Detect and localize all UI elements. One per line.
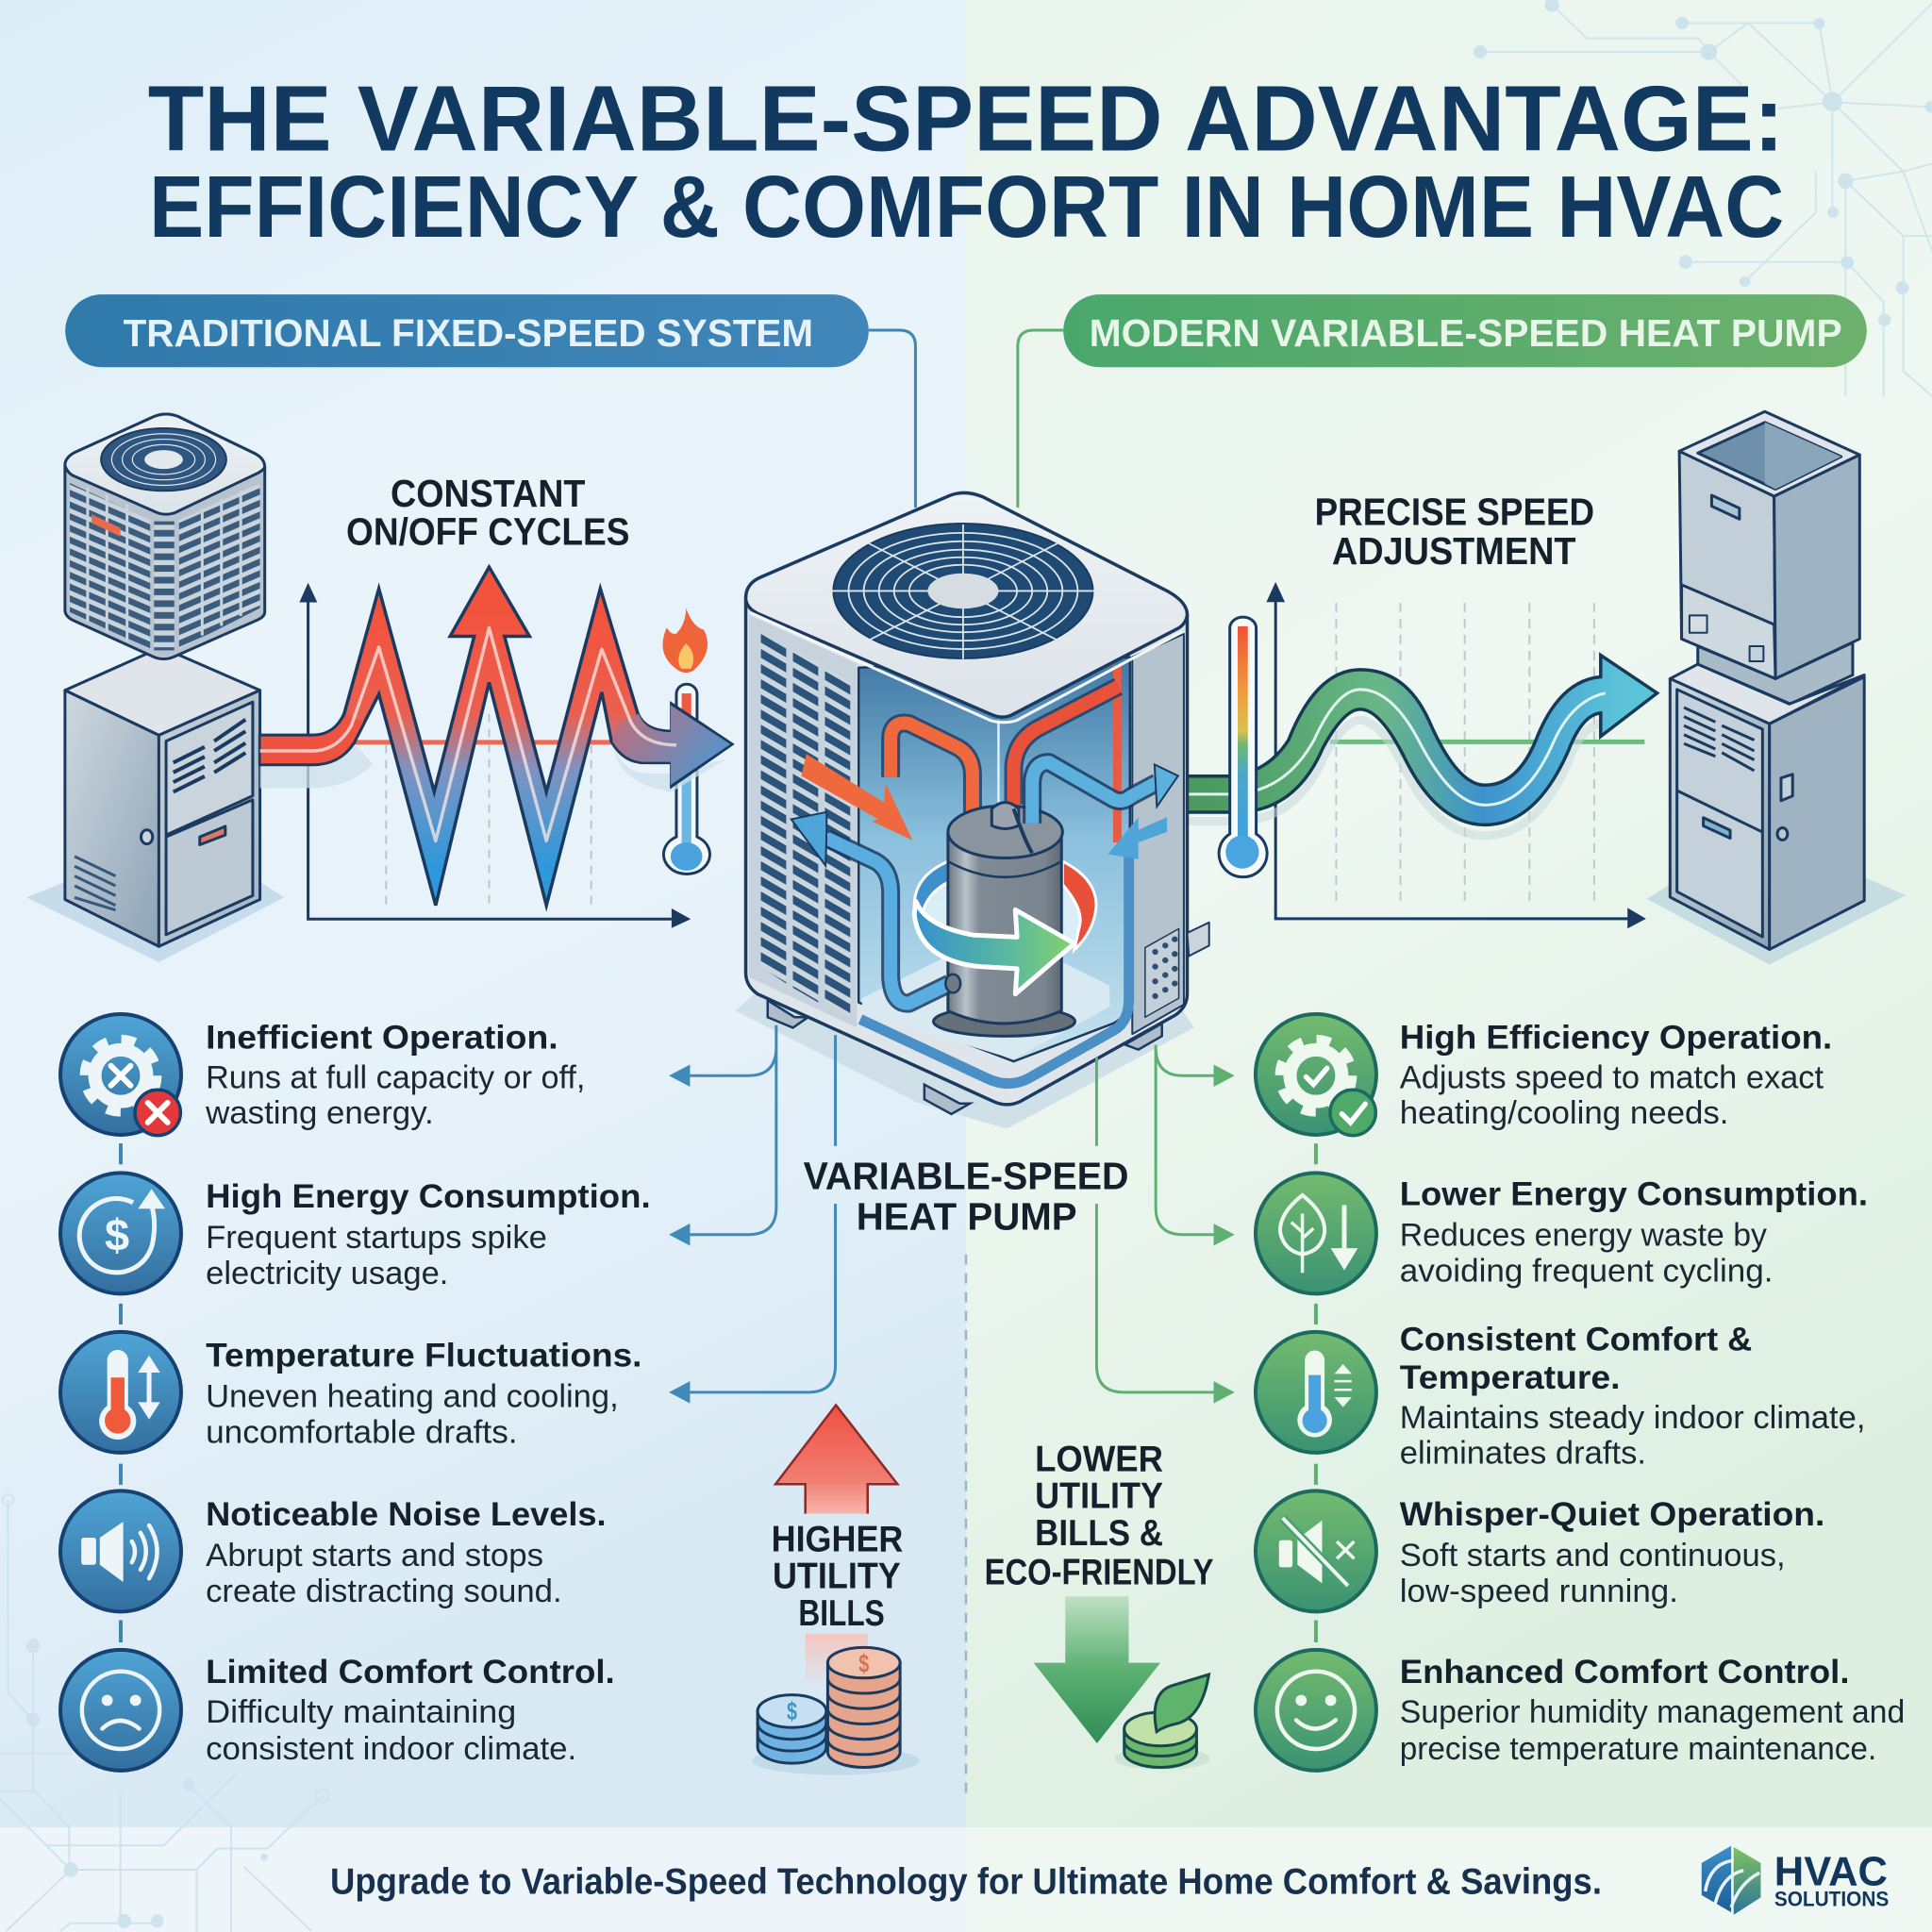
icon: dollar rising [60, 1173, 181, 1293]
icon: thermometer [663, 684, 709, 874]
icon: gear with red x [60, 1014, 181, 1136]
logo: HVAC Solutions: SOLUTIONS [1774, 1888, 1889, 1911]
icon: sad face [60, 1650, 181, 1771]
item: noticeable noise levels [60, 1491, 607, 1611]
item: temperature fluctuations: uncomfortable drafts. [206, 1414, 518, 1450]
chart: on/off cycling [299, 583, 691, 928]
item: limited comfort control: Difficulty maintaining [206, 1694, 516, 1730]
connector: modern pill to unit [1018, 330, 1063, 508]
icon: thermometer with colour scale [1219, 617, 1267, 877]
icon: indoor air handler [1647, 411, 1906, 964]
item: high efficiency operation: heating/cooling needs. [1400, 1095, 1728, 1131]
item: high efficiency operation [1256, 1014, 1832, 1136]
background left panel [0, 0, 966, 1827]
label: constant on/off cycles: CONSTANT [391, 472, 586, 515]
item: consistent comfort and temperature: Temperature. [1400, 1359, 1621, 1396]
item: noticeable noise levels: Noticeable Noise Levels. [206, 1496, 607, 1533]
unit feet [768, 1000, 1162, 1114]
connector lines: unit to benefits [1096, 1045, 1235, 1404]
label: variable-speed heat pump [804, 1154, 1128, 1239]
label: precise speed adjustment [1315, 490, 1594, 573]
arrow: temperature swing line [260, 567, 732, 906]
halo and back of rotation arrow [914, 861, 1096, 964]
title: THE VARIABLE-SPEED ADVANTAGE: [148, 66, 1784, 170]
arrow: bills falling [1034, 1596, 1160, 1743]
item: whisper-quiet operation [1256, 1491, 1824, 1611]
item: temperature fluctuations: Uneven heating and cooling, [206, 1379, 619, 1415]
icon: smiling face [1256, 1650, 1376, 1771]
icon: furnace [26, 647, 284, 962]
callout: lower utility bills and eco-friendly: BILLS & [1035, 1513, 1163, 1554]
item: high efficiency operation: Adjusts speed to match exact [1400, 1059, 1824, 1095]
item: consistent comfort and temperature: eliminates drafts. [1400, 1436, 1646, 1472]
connector lines: unit to drawbacks [669, 1025, 836, 1404]
arrow: smooth speed wave [1185, 656, 1657, 836]
item: consistent comfort and temperature: Consistent Comfort & [1400, 1322, 1752, 1358]
icon: leaf and down arrow [1256, 1173, 1376, 1293]
callout: lower utility bills and eco-friendly: LOWER [1035, 1440, 1163, 1480]
heading pill: modern heat pump [1063, 294, 1867, 367]
unit cabinet [746, 598, 1209, 1105]
icon: logo mark [1702, 1846, 1760, 1915]
item: consistent comfort and temperature: Maintains steady indoor climate, [1400, 1400, 1865, 1436]
arrows: cool air flows [791, 764, 1178, 866]
arrow: hot air in [801, 754, 912, 841]
rotation arrow around compressor [914, 901, 1074, 994]
item: inefficient operation [60, 1014, 585, 1136]
item: high energy consumption [60, 1173, 651, 1293]
icon: steady thermometer [1256, 1332, 1376, 1453]
refrigerant tube: hot discharge [891, 687, 1118, 832]
label: variable-speed heat pump: HEAT PUMP [857, 1195, 1077, 1239]
callout: higher utility bills [752, 1405, 920, 1775]
item: limited comfort control [60, 1650, 615, 1771]
title: EFFICIENCY & COMFORT IN HOME HVAC [149, 158, 1784, 256]
icon: loud speaker [60, 1491, 181, 1611]
item: inefficient operation: Inefficient Operation. [206, 1020, 558, 1057]
background right panel [966, 0, 1932, 1827]
icon: outdoor condenser [65, 414, 265, 659]
icon: coin stacks [752, 1647, 920, 1775]
traditional equipment and cycling chart [26, 414, 732, 962]
icon: green coin with leaf [1114, 1674, 1210, 1770]
item: temperature fluctuations [60, 1332, 641, 1453]
callout: higher utility bills: BILLS [798, 1593, 885, 1634]
item: enhanced comfort control: Enhanced Comfort Control. [1400, 1654, 1849, 1690]
item: noticeable noise levels: create distracting sound. [206, 1574, 562, 1609]
footer band [0, 1827, 1932, 1932]
item: lower energy consumption: avoiding frequent cycling. [1400, 1253, 1774, 1289]
chart: steady speed [1266, 582, 1646, 928]
item: enhanced comfort control [1256, 1650, 1905, 1771]
label: precise speed adjustment: PRECISE SPEED [1315, 490, 1594, 533]
item: whisper-quiet operation: low-speed running. [1400, 1574, 1678, 1609]
label: variable-speed heat pump: VARIABLE-SPEED [804, 1154, 1128, 1197]
callout: higher utility bills: HIGHER [772, 1519, 904, 1559]
item: enhanced comfort control: precise temperature maintenance. [1400, 1731, 1876, 1767]
panel: drawbacks list [60, 1014, 651, 1771]
item: high energy consumption: High Energy Consumption. [206, 1178, 651, 1215]
heading pill: modern heat pump: MODERN VARIABLE-SPEED HEAT PUMP [1090, 311, 1842, 355]
label: precise speed adjustment: ADJUSTMENT [1332, 529, 1576, 573]
label: constant on/off cycles [346, 472, 629, 553]
heading pill: traditional system: TRADITIONAL FIXED-SPEED SYSTEM [124, 311, 813, 355]
icon: gear with green check [1256, 1014, 1376, 1136]
title [148, 66, 1784, 256]
item: high energy consumption: Frequent startups spike [206, 1220, 547, 1256]
item: lower energy consumption: Reduces energy waste by [1400, 1217, 1767, 1253]
central variable-speed heat pump cutaway [736, 492, 1209, 1129]
callout: lower utility bills and eco-friendly: UTILITY [1035, 1476, 1163, 1517]
arrow: bills rising [775, 1405, 897, 1690]
logo: HVAC Solutions: HVAC [1774, 1849, 1888, 1894]
item: lower energy consumption: Lower Energy Consumption. [1400, 1175, 1868, 1212]
icon: coin stacks: $ [787, 1698, 797, 1726]
item: temperature fluctuations: Temperature Fluctuations. [206, 1337, 641, 1374]
divider: center dashed line [965, 1255, 967, 1796]
logo: HVAC Solutions [1702, 1846, 1889, 1915]
item: whisper-quiet operation: Soft starts and continuous, [1400, 1538, 1786, 1574]
modern equipment and steady chart [1185, 411, 1906, 964]
item: limited comfort control: consistent indoor climate. [206, 1731, 576, 1767]
item: high efficiency operation: High Efficiency Operation. [1400, 1020, 1832, 1057]
connector: traditional pill to unit [869, 330, 915, 508]
item: enhanced comfort control: Superior humidity management and [1400, 1694, 1905, 1730]
item: whisper-quiet operation: Whisper-Quiet Operation. [1400, 1496, 1824, 1533]
label: constant on/off cycles: ON/OFF CYCLES [346, 509, 629, 553]
item: inefficient operation: wasting energy. [205, 1095, 434, 1131]
refrigerant tube: cool return [826, 762, 1157, 1004]
icon: thermometer swing [60, 1332, 181, 1453]
callout: lower utility bills and eco-friendly: ECO-FRIENDLY [985, 1553, 1214, 1593]
callout: higher utility bills: UTILITY [773, 1557, 901, 1597]
item: lower energy consumption [1256, 1173, 1868, 1293]
icon: dollar rising: $ [105, 1210, 129, 1260]
heading pill: traditional system [65, 294, 869, 367]
callout: lower utility bills and eco-friendly [985, 1440, 1214, 1770]
icon: flame [663, 608, 708, 673]
unit lid and fan grille [746, 492, 1187, 723]
item: high energy consumption: electricity usage. [206, 1256, 448, 1291]
icon: muted speaker [1256, 1491, 1376, 1611]
icon: coin stacks: $ [858, 1650, 869, 1678]
item: noticeable noise levels: Abrupt starts and stops [206, 1538, 543, 1574]
item: limited comfort control: Limited Comfort Control. [206, 1654, 615, 1690]
item: consistent comfort and temperature [1256, 1322, 1865, 1472]
compressor [934, 803, 1075, 1036]
panel: benefits list [1256, 1014, 1905, 1771]
item: inefficient operation: Runs at full capacity or off, [206, 1059, 585, 1095]
footer message: Upgrade to Variable-Speed Technology for Ultimate Home Comfort & Savings. [330, 1862, 1602, 1903]
